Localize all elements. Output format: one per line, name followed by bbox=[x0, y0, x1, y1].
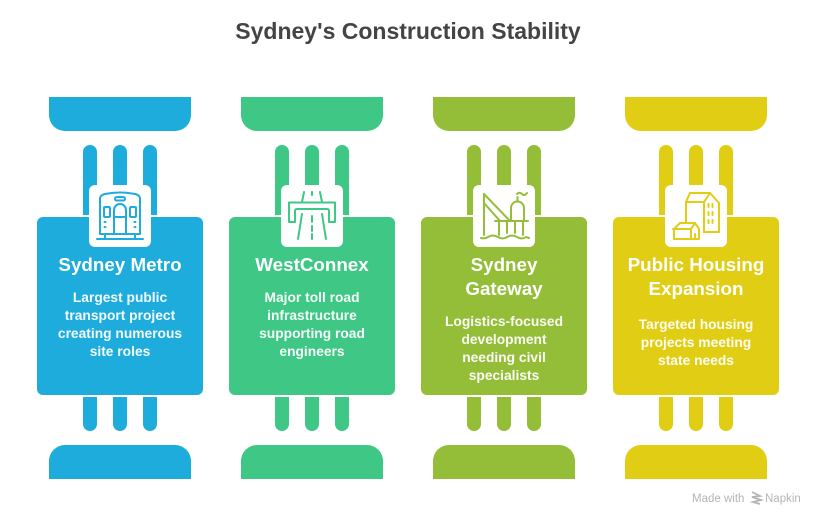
description: development bbox=[461, 332, 547, 347]
description: Logistics-focused bbox=[445, 314, 563, 329]
bottom cap bbox=[49, 445, 191, 479]
upper pillars bbox=[659, 145, 733, 215]
icon: port crane bbox=[473, 185, 535, 247]
lower pillars bbox=[83, 397, 157, 431]
top cap bbox=[433, 97, 575, 131]
bottom cap bbox=[433, 445, 575, 479]
description: site roles bbox=[90, 344, 151, 359]
bottom cap bbox=[241, 445, 383, 479]
icon: housing buildings bbox=[665, 185, 727, 247]
description: Largest public bbox=[73, 290, 167, 305]
description: transport project bbox=[65, 308, 176, 323]
description: Major toll road bbox=[264, 290, 360, 305]
lower pillars bbox=[275, 397, 349, 431]
card bbox=[229, 217, 395, 395]
upper pillars bbox=[467, 145, 541, 215]
lower pillars bbox=[467, 397, 541, 431]
heading: Sydney bbox=[471, 254, 538, 275]
description: Targeted housing bbox=[639, 317, 753, 332]
card bbox=[37, 217, 203, 395]
heading: WestConnex bbox=[255, 254, 369, 275]
description: supporting road bbox=[259, 326, 365, 341]
description: engineers bbox=[279, 344, 345, 359]
description: projects meeting bbox=[641, 335, 751, 350]
description: infrastructure bbox=[267, 308, 357, 323]
upper pillars bbox=[83, 145, 157, 215]
top cap bbox=[625, 97, 767, 131]
heading: Sydney Metro bbox=[58, 254, 182, 275]
lower pillars bbox=[659, 397, 733, 431]
heading: Gateway bbox=[465, 278, 543, 299]
card bbox=[613, 217, 779, 395]
description: creating numerous bbox=[58, 326, 182, 341]
top cap bbox=[241, 97, 383, 131]
icon: highway overpass bbox=[281, 185, 343, 247]
panel: Sydney Metro bbox=[37, 97, 203, 479]
panel: WestConnex bbox=[229, 97, 395, 479]
watermark: Made with Napkin: Napkin bbox=[765, 493, 801, 505]
card bbox=[421, 217, 587, 395]
icon: train bbox=[89, 185, 151, 247]
upper pillars bbox=[275, 145, 349, 215]
watermark: Made with Napkin: Made with bbox=[692, 493, 744, 505]
heading: Public Housing bbox=[628, 254, 764, 275]
description: specialists bbox=[469, 368, 540, 383]
title: Sydney's Construction Stability bbox=[235, 18, 581, 44]
panel: Public Housing Expansion bbox=[613, 97, 779, 479]
bottom cap bbox=[625, 445, 767, 479]
watermark: Made with Napkin bbox=[692, 492, 801, 505]
description: needing civil bbox=[462, 350, 546, 365]
panel: Sydney Gateway bbox=[421, 97, 587, 479]
top cap bbox=[49, 97, 191, 131]
icon: napkin logo bbox=[752, 492, 761, 504]
description: state needs bbox=[658, 353, 734, 368]
heading: Expansion bbox=[649, 278, 743, 299]
